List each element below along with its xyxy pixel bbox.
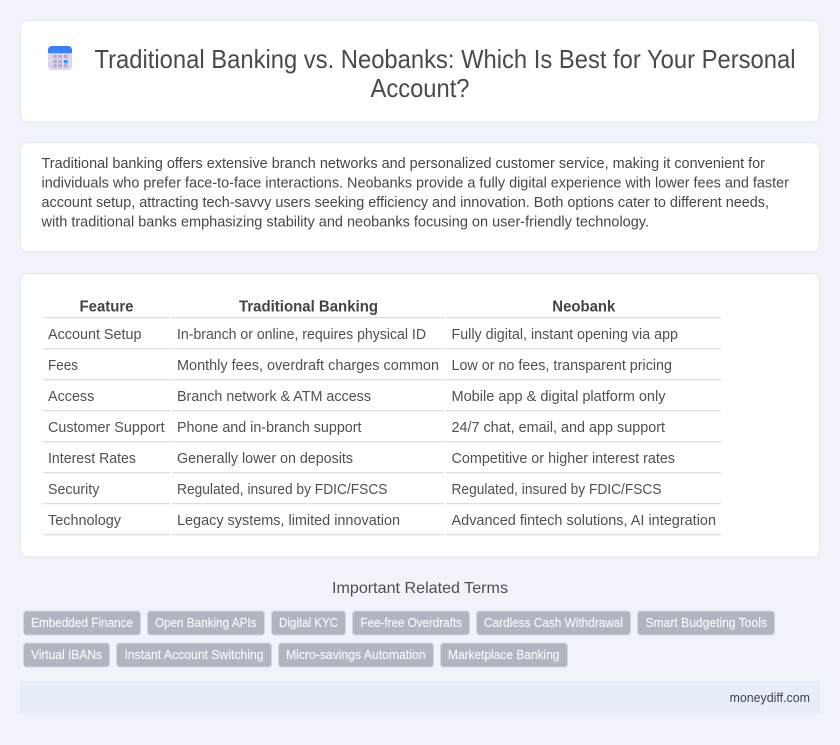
tag: digital kyc [272, 611, 346, 635]
panel: comparison table [20, 274, 820, 557]
tag: marketplace banking [440, 643, 568, 667]
tag: fee-free overdrafts: Fee-free Overdrafts [360, 615, 462, 630]
footer [20, 681, 820, 714]
table row: technology: Advanced fintech solutions, AI integration [452, 513, 716, 529]
table row: fees: Monthly fees, overdraft charges common [177, 358, 439, 374]
table row: fees: Fees [48, 358, 78, 374]
related term tags [24, 611, 774, 667]
table row: account setup: In-branch or online, requires physical ID [177, 327, 426, 343]
table row: interest rates: Interest Rates [48, 451, 136, 467]
table header row: Traditional Banking [239, 299, 378, 316]
table row: security: Security [48, 482, 100, 498]
tag: micro-savings automation [278, 643, 434, 667]
table row: interest rates [43, 451, 721, 473]
tag: micro-savings automation: Micro-savings Automation [286, 647, 426, 662]
tag: embedded finance: Embedded Finance [31, 615, 133, 630]
tag: cardless cash withdrawal [476, 611, 630, 635]
panel: introduction text: individuals who prefer face-to-face interactions. Neobanks provide a fully digital experience with lower fees and faster [42, 176, 789, 192]
table row: access: Branch network & ATM access [177, 389, 371, 405]
tag: open banking apis [148, 611, 264, 635]
table row: interest rates: Competitive or higher interest rates [452, 451, 675, 467]
table row: access: Mobile app & digital platform only [452, 389, 666, 405]
tag: virtual ibans: Virtual IBANs [31, 647, 102, 662]
title: Traditional Banking vs. Neobanks: Which Is Best for Your Personal [94, 46, 796, 74]
table row: customer support: Phone and in-branch support [177, 420, 362, 436]
table row: security: Regulated, insured by FDIC/FSCS [452, 482, 662, 498]
table row: technology: Legacy systems, limited innovation [177, 513, 400, 529]
tag: fee-free overdrafts [352, 611, 470, 635]
icon: calendar [48, 46, 72, 70]
title: Account? [370, 75, 470, 103]
table row: customer support [43, 420, 721, 442]
panel: introduction text: Traditional banking offers extensive branch networks and personalized customer service, making it convenient for [42, 156, 765, 172]
tag: embedded finance [24, 611, 140, 635]
table row: security [43, 482, 721, 504]
table row: access: Access [48, 389, 94, 405]
tag: instant account switching [116, 643, 272, 667]
tag: instant account switching: Instant Account Switching [124, 647, 264, 662]
footer: moneydiff.com [730, 690, 810, 705]
table row: technology: Technology [48, 513, 122, 529]
panel: introduction text: account setup, attracting tech-savvy users seeking efficiency and innovation. Both options cater to different needs, [42, 195, 769, 211]
table row: customer support: Customer Support [48, 420, 165, 436]
table row: security: Regulated, insured by FDIC/FSCS [177, 482, 388, 498]
table row: account setup: Fully digital, instant opening via app [452, 327, 678, 343]
table row: fees: Low or no fees, transparent pricing [452, 358, 672, 374]
table row: customer support: 24/7 chat, email, and app support [452, 420, 665, 436]
table row: technology [43, 513, 721, 535]
table header row [43, 299, 721, 318]
tag: open banking apis: Open Banking APIs [155, 615, 257, 630]
table row: fees [43, 358, 721, 380]
table header row: Neobank [552, 299, 615, 316]
panel: header [20, 20, 820, 122]
table row: account setup: Account Setup [48, 327, 142, 343]
tag: smart budgeting tools: Smart Budgeting Tools [646, 615, 767, 630]
tag: cardless cash withdrawal: Cardless Cash Withdrawal [484, 615, 623, 630]
tag: virtual ibans [24, 643, 110, 667]
table row: account setup [43, 327, 721, 349]
table row: access [43, 389, 721, 411]
tag: marketplace banking: Marketplace Banking [448, 647, 560, 662]
tag: smart budgeting tools [638, 611, 774, 635]
tag: digital kyc: Digital KYC [279, 615, 338, 630]
panel: introduction text [20, 142, 820, 252]
panel: introduction text: with traditional banks emphasizing stability and neobanks focusing on user-friendly technology. [41, 214, 649, 230]
table row: interest rates: Generally lower on deposits [177, 451, 353, 467]
title [94, 46, 796, 103]
heading: important related terms: Important Related Terms [332, 580, 508, 597]
table header row: Feature [80, 299, 134, 316]
